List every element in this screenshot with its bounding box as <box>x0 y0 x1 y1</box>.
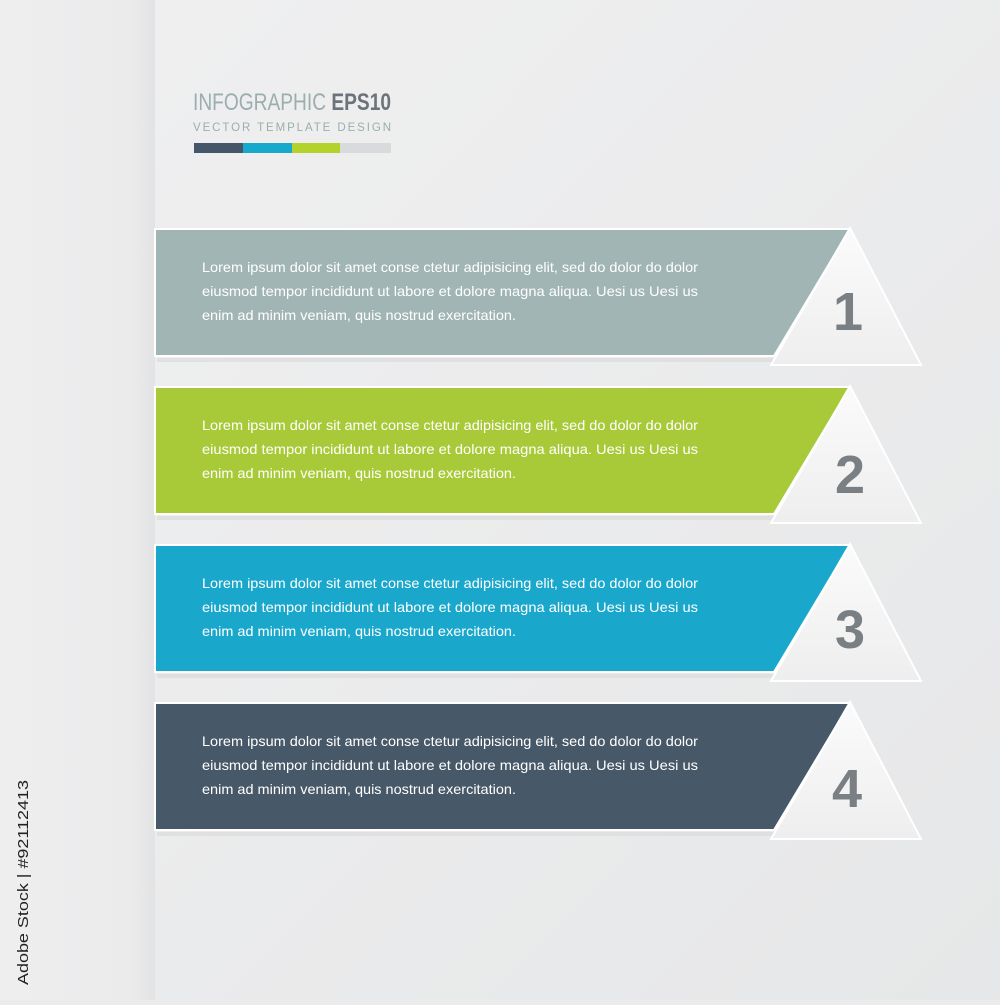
triangle number 3: 3 <box>835 600 865 660</box>
text block 4: Lorem ipsum dolor sit amet conse ctetur adipisicing elit, sed do dolor do dolor <box>202 733 698 749</box>
text block 3: enim ad minim veniam, quis nostrud exercitation. <box>202 623 516 639</box>
step 1 <box>155 228 921 365</box>
subtitle: VECTOR TEMPLATE DESIGN <box>193 122 391 134</box>
triangle number 4: 4 <box>832 759 862 819</box>
triangle number 3 <box>771 544 921 681</box>
text block 3: Lorem ipsum dolor sit amet conse ctetur adipisicing elit, sed do dolor do dolor <box>202 575 698 591</box>
text block 1: eiusmod tempor incididunt ut labore et dolore magna aliqua. Uesi us Uesi us <box>202 283 698 299</box>
text block 4: enim ad minim veniam, quis nostrud exercitation. <box>202 781 516 797</box>
title: INFOGRAPHIC EPS10 <box>193 89 391 116</box>
text block 1 <box>202 259 698 323</box>
header <box>193 89 391 153</box>
stock id: Adobe Stock | #92112413 <box>15 780 32 985</box>
text block 4 <box>202 733 698 797</box>
text block 1: Lorem ipsum dolor sit amet conse ctetur adipisicing elit, sed do dolor do dolor <box>202 259 698 275</box>
triangle number 4 <box>771 702 921 839</box>
step 2 <box>155 386 921 523</box>
triangle number 1: 1 <box>833 282 863 342</box>
text block 1: enim ad minim veniam, quis nostrud exercitation. <box>202 307 516 323</box>
triangle number 2 <box>771 386 921 523</box>
text block 2: Lorem ipsum dolor sit amet conse ctetur adipisicing elit, sed do dolor do dolor <box>202 417 698 433</box>
text block 2 <box>202 417 698 481</box>
step 4 <box>155 702 921 839</box>
text block 2: eiusmod tempor incididunt ut labore et dolore magna aliqua. Uesi us Uesi us <box>202 441 698 457</box>
text block 2: enim ad minim veniam, quis nostrud exercitation. <box>202 465 516 481</box>
text block 3 <box>202 575 698 639</box>
color bar <box>194 143 391 153</box>
triangle number 2: 2 <box>835 445 865 505</box>
triangle number 1 <box>771 228 921 365</box>
text block 4: eiusmod tempor incididunt ut labore et dolore magna aliqua. Uesi us Uesi us <box>202 757 698 773</box>
text block 3: eiusmod tempor incididunt ut labore et dolore magna aliqua. Uesi us Uesi us <box>202 599 698 615</box>
step 3 <box>155 544 921 681</box>
